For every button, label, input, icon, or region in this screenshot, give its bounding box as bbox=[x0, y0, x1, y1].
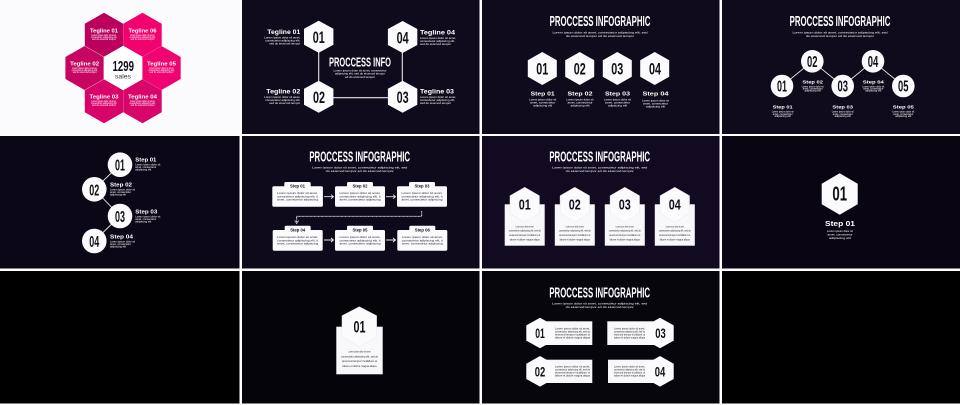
text block: center description: ed do eiusmod tempor bbox=[345, 75, 375, 79]
circle 04: 04 bbox=[868, 54, 878, 71]
hexagon: Tegline 03: sed do eiusmod tempor bbox=[92, 103, 116, 107]
hexagon: Tegline 05: Lorem ipsum dolor sit amet, bbox=[149, 66, 174, 70]
tab 04 bbox=[608, 356, 674, 387]
panel: pink hexagon cluster bbox=[0, 0, 240, 134]
tab 04: 04 bbox=[655, 363, 665, 379]
tab 01: consectetur adipiscing elit, sed do bbox=[555, 329, 590, 333]
text block: center description bbox=[334, 68, 387, 79]
hexagon: Tegline 01: Tegline 01 bbox=[90, 28, 118, 34]
label: Step 05: amet, consectetur bbox=[893, 112, 913, 116]
tab 04: Lorem ipsum dolor sit amet, bbox=[614, 364, 645, 368]
text block: subtitle: Lorem ipsum dolor sit amet, consectetur adipiscing elit, sed bbox=[552, 166, 648, 170]
text block: center description: adipiscing elit, sed do eiusmod tempor bbox=[335, 72, 385, 76]
card: Step 01: amet, consectetur adipiscing bbox=[277, 198, 319, 202]
label: Tegline 01 bbox=[264, 29, 301, 46]
envelope card 02: 02 bbox=[569, 197, 581, 214]
label: Tegline 03 bbox=[420, 88, 456, 105]
envelope card 02: eiusmod tempor incididunt ut bbox=[559, 233, 591, 237]
card: Step 05: amet, consectetur adipiscing bbox=[340, 242, 381, 246]
tab 03 bbox=[607, 318, 674, 348]
panel: empty black slide left bbox=[0, 271, 240, 404]
tab 02: Lorem ipsum dolor sit amet, bbox=[555, 364, 590, 368]
circle 05 bbox=[892, 75, 915, 97]
circle 01: 01 bbox=[777, 79, 787, 96]
hexagon: center sales total: sales bbox=[115, 74, 132, 80]
card: Step 02 bbox=[335, 182, 385, 207]
card: Step 01 bbox=[272, 182, 323, 207]
panel: four envelope cards bbox=[482, 136, 720, 268]
tab 01: labore et dolore magna aliqua bbox=[555, 335, 590, 339]
hexagon: Tegline 02: Lorem ipsum dolor sit amet, bbox=[72, 66, 97, 70]
envelope card 04: eiusmod tempor incididunt ut bbox=[659, 233, 691, 237]
text block: subtitle: do eiusmod tempor ed do eiusmod tempor bbox=[806, 34, 874, 38]
text block: center description: Lorem ipsum dolor sit amet, consectetur bbox=[334, 68, 387, 72]
label: Step 02 bbox=[110, 183, 135, 196]
card: Step 03: Step 03 bbox=[414, 184, 430, 189]
tab 01: 01 bbox=[535, 325, 545, 341]
label: Step 05: adipiscing elit bbox=[895, 114, 912, 118]
label: Tegline 04: consectetur adipiscing elit, bbox=[420, 39, 455, 43]
tab 03: eiusmod tempor incididunt ut bbox=[614, 332, 645, 336]
text block: subtitle: Lorem ipsum dolor sit amet, consectetur adipiscing elit, sed bbox=[312, 166, 408, 170]
step 02: Step 02 bbox=[568, 92, 592, 98]
envelope card 01: Lorem ipsum dolor sit amet bbox=[348, 350, 371, 354]
heading: proccess info: PROCCESS INFO bbox=[329, 55, 391, 70]
tab 03: 03 bbox=[655, 325, 666, 341]
label: Step 02: amet, consectetur bbox=[110, 190, 131, 194]
label: Step 03: amet, consectetur bbox=[833, 112, 853, 116]
step 04 bbox=[640, 52, 669, 108]
text block: subtitle: do eiusmod tempor ed do eiusmod tempor bbox=[326, 169, 394, 173]
label: Tegline 01: sed do eiusmod tempor bbox=[269, 42, 300, 46]
connector lines bbox=[319, 50, 402, 98]
envelope card 04 bbox=[655, 187, 695, 246]
hexagon: Tegline 05 bbox=[142, 46, 181, 90]
card: Step 06: Step 06 bbox=[415, 228, 430, 233]
tab 03: consectetur adipiscing elit, sed do bbox=[614, 329, 645, 333]
hexagon 02: 02 bbox=[313, 88, 325, 107]
label: Step 02: Step 02 bbox=[110, 183, 132, 189]
envelope card 01: eiusmod tempor incididunt ut bbox=[342, 359, 377, 363]
hexagon: Tegline 03 bbox=[85, 79, 123, 123]
step 02: adipiscing elit bbox=[570, 104, 590, 108]
card: Step 01: consectetur adipiscing elit, it bbox=[277, 194, 318, 198]
circle 03 bbox=[108, 204, 132, 228]
panel: six step flow bbox=[242, 136, 480, 268]
hexagon 01: 01 bbox=[313, 28, 325, 47]
hexagon: Tegline 06: sed do eiusmod tempor bbox=[130, 37, 155, 41]
label: Tegline 04 bbox=[420, 30, 456, 46]
hexagon 01 bbox=[822, 173, 858, 215]
hexagon: Tegline 01: consectetur adipiscing elit, bbox=[91, 35, 117, 39]
card: Step 06: amet, consectetur adipiscing bbox=[402, 242, 443, 246]
card: Step 04: Step 04 bbox=[290, 228, 306, 233]
step 01: adipiscing elit bbox=[533, 104, 553, 108]
step 03: amet, consectetur bbox=[605, 100, 630, 104]
panel: five circle steps bbox=[722, 0, 960, 134]
step 01: Lorem ipsum dolor sit bbox=[529, 98, 557, 102]
card: Step 03: consectetur adipiscing elit, it bbox=[402, 194, 443, 198]
step 04: amet, consectetur bbox=[643, 102, 668, 106]
label: Tegline 03: sed do eiusmod tempor bbox=[420, 101, 451, 105]
circle 03: 03 bbox=[115, 209, 125, 226]
envelope card 01 bbox=[336, 307, 383, 374]
envelope card 03: labore et dolore magna aliqua bbox=[610, 237, 640, 241]
label: Step 05 bbox=[892, 104, 915, 118]
envelope card 03: consectetur adipiscing elit, sed do bbox=[609, 229, 641, 233]
hexagon 01: 01 bbox=[832, 184, 847, 206]
step 03: Step 03 bbox=[605, 92, 631, 98]
panel: vertical zigzag circles bbox=[0, 136, 240, 268]
label: Step 02: adipiscing elit bbox=[805, 89, 821, 93]
card: Step 05 bbox=[335, 226, 385, 251]
text block: subtitle bbox=[552, 301, 648, 309]
envelope card 01: Lorem ipsum dolor sit amet bbox=[516, 224, 534, 228]
label: Tegline 02: Lorem ipsum dolor sit amet, bbox=[264, 95, 301, 99]
label: Step 01: Step 01 bbox=[825, 219, 856, 228]
hexagon: Tegline 02: consectetur adipiscing elit, bbox=[72, 68, 98, 72]
label: Step 01 bbox=[135, 158, 161, 171]
text block: subtitle: do eiusmod tempor ed do eiusmod tempor bbox=[566, 305, 634, 309]
step 03: Lorem ipsum dolor sit bbox=[604, 98, 631, 102]
label: Tegline 04: sed do eiusmod tempor bbox=[420, 42, 451, 46]
label: Step 03: Lorem ipsum dolor sit bbox=[832, 110, 854, 114]
hexagon: Tegline 01: Lorem ipsum dolor sit amet, bbox=[92, 33, 117, 37]
arrow: step 04 to 05 bbox=[324, 238, 334, 242]
text block: subtitle bbox=[552, 166, 648, 173]
circle 03: 03 bbox=[837, 79, 848, 96]
label: Step 04 bbox=[110, 234, 135, 249]
circle 02: 02 bbox=[89, 182, 99, 199]
envelope card 04: labore et dolore magna aliqua bbox=[660, 237, 690, 241]
card: Step 02: consectetur adipiscing elit, it bbox=[340, 194, 381, 198]
step 04: 04 bbox=[649, 61, 662, 79]
arrow: step 05 to 06 bbox=[386, 238, 396, 242]
arrow: step 01 to 02 bbox=[324, 195, 334, 199]
hexagon 01 bbox=[304, 21, 333, 53]
label: Step 05: Lorem ipsum dolor sit bbox=[892, 110, 915, 114]
hexagon: Tegline 02: sed do eiusmod tempor bbox=[73, 70, 97, 74]
step 01: amet, consectetur bbox=[530, 100, 555, 104]
envelope card 03: Lorem ipsum dolor sit amet bbox=[616, 224, 634, 228]
label: Step 01: Lorem ipsum dolor sit bbox=[827, 229, 853, 233]
hexagon 04 bbox=[388, 21, 417, 53]
envelope card 03: 03 bbox=[619, 197, 631, 214]
text block: subtitle: Lorem ipsum dolor sit amet, consectetur adipiscing elit, sed bbox=[792, 30, 888, 34]
text block: subtitle bbox=[552, 30, 648, 38]
hexagon: Tegline 03: Tegline 03 bbox=[90, 94, 119, 100]
circle 03 bbox=[831, 75, 854, 97]
label: Step 02: Step 02 bbox=[802, 80, 823, 86]
step 01 bbox=[528, 52, 557, 108]
label: Step 03: Lorem ipsum dolor sit bbox=[135, 215, 161, 219]
hexagon: Tegline 03: consectetur adipiscing elit, bbox=[91, 101, 117, 105]
label: Step 03: adipiscing elit bbox=[135, 220, 152, 224]
heading: proccess infographic: PROCCESS INFOGRAPHIC bbox=[549, 150, 650, 166]
hexagon: Tegline 06: Lorem ipsum dolor sit amet, bbox=[130, 33, 155, 37]
tab 03: Lorem ipsum dolor sit amet, bbox=[614, 326, 645, 330]
envelope card 01 bbox=[505, 187, 545, 246]
label: Tegline 03: Tegline 03 bbox=[420, 88, 455, 96]
card: Step 03: amet, consectetur adipiscing bbox=[402, 198, 443, 202]
hexagon: Tegline 06 bbox=[123, 13, 162, 57]
label: Step 01: amet, consectetur bbox=[773, 112, 793, 116]
label: Step 01 bbox=[772, 104, 794, 118]
step 02 bbox=[565, 52, 594, 108]
envelope card 01: eiusmod tempor incididunt ut bbox=[509, 233, 540, 237]
circle 05: 05 bbox=[898, 79, 909, 96]
panel: empty black slide right bbox=[722, 271, 960, 404]
label: Tegline 04: Lorem ipsum dolor sit amet, bbox=[420, 36, 456, 40]
circle 04 bbox=[82, 229, 107, 253]
card: Step 04 bbox=[273, 226, 323, 251]
circle 02: 02 bbox=[807, 54, 818, 71]
label: Step 03: amet, consectetur bbox=[135, 217, 156, 221]
hexagon: Tegline 01: sed do eiusmod tempor bbox=[92, 37, 116, 41]
hexagon: Tegline 03: Lorem ipsum dolor sit amet, bbox=[92, 99, 117, 103]
tab 02: labore et dolore magna aliqua bbox=[555, 373, 590, 377]
label: Tegline 02: sed do eiusmod tempor bbox=[269, 101, 300, 105]
card: Step 05: consectetur adipiscing elit, it bbox=[340, 238, 381, 242]
label: Step 02: Lorem ipsum dolor sit bbox=[110, 188, 135, 192]
label: Step 03: Step 03 bbox=[135, 210, 157, 216]
envelope card 02 bbox=[555, 187, 595, 246]
circle 01 bbox=[771, 75, 793, 97]
label: Tegline 03: Lorem ipsum dolor sit amet, bbox=[420, 95, 456, 99]
envelope card 02: Lorem ipsum dolor sit amet bbox=[566, 224, 584, 228]
card: Step 06 bbox=[397, 226, 447, 251]
card: Step 02: Step 02 bbox=[352, 184, 368, 189]
label: Step 02 bbox=[802, 80, 824, 93]
arrow: step 02 to 03 bbox=[386, 195, 396, 199]
tab 02 bbox=[526, 356, 592, 387]
hexagon 03: 03 bbox=[397, 88, 409, 107]
card: Step 05: Lorem ipsum dolor sit amet, bbox=[340, 235, 381, 239]
hexagon: Tegline 02 bbox=[65, 46, 104, 90]
hexagon 04: 04 bbox=[397, 28, 409, 48]
card: Step 04: Lorem ipsum dolor sit amet, bbox=[277, 235, 318, 239]
step 03: adipiscing elit bbox=[608, 104, 627, 108]
label: Step 01: Lorem ipsum dolor sit bbox=[135, 163, 161, 167]
card: Step 01: Lorem ipsum dolor sit amet, bbox=[277, 191, 318, 195]
card: Step 06: consectetur adipiscing elit, it bbox=[402, 238, 443, 242]
label: Step 01: Step 01 bbox=[135, 158, 156, 164]
hexagon: center sales total bbox=[104, 46, 142, 90]
text block: subtitle bbox=[312, 166, 408, 173]
envelope card 01: consectetur adipiscing elit, sed do bbox=[509, 229, 541, 233]
label: Tegline 02 bbox=[264, 88, 301, 105]
tab 01: eiusmod tempor incididunt ut bbox=[555, 332, 590, 336]
envelope card 01: labore et dolore magna aliqua bbox=[510, 237, 540, 241]
envelope card 02: labore et dolore magna aliqua bbox=[560, 237, 590, 241]
hexagon: Tegline 04: sed do eiusmod tempor bbox=[130, 103, 155, 107]
card: Step 03: Lorem ipsum dolor sit amet, bbox=[402, 191, 443, 195]
step 03: 03 bbox=[611, 61, 623, 79]
tab 04: eiusmod tempor incididunt ut bbox=[614, 370, 645, 374]
connector lines bbox=[782, 61, 903, 86]
tab 02: 02 bbox=[535, 363, 545, 379]
tab 04: labore et dolore magna aliqua bbox=[614, 373, 645, 377]
step 01: 01 bbox=[536, 61, 548, 79]
label: Tegline 01: Tegline 01 bbox=[267, 29, 301, 36]
circle 02 bbox=[82, 177, 107, 202]
hexagon: Tegline 06: Tegline 06 bbox=[128, 28, 157, 34]
step 04: Lorem ipsum dolor sit bbox=[642, 98, 669, 102]
label: Tegline 02: Tegline 02 bbox=[266, 88, 301, 96]
envelope card 01: 01 bbox=[519, 197, 531, 214]
envelope card 02: consectetur adipiscing elit, sed do bbox=[559, 229, 591, 233]
label: Step 04: adipiscing elit bbox=[865, 89, 882, 93]
hexagon 03 bbox=[388, 81, 417, 113]
tab 01: Lorem ipsum dolor sit amet, bbox=[555, 326, 590, 330]
label: Step 04 bbox=[862, 80, 885, 93]
envelope card 01: labore et dolore magna aliqua bbox=[342, 364, 377, 368]
envelope card 01: consectetur adipiscing elit, sed do bbox=[341, 354, 378, 358]
envelope card 04: 04 bbox=[669, 197, 681, 214]
card: Step 03 bbox=[397, 182, 447, 207]
step 01: Step 01 bbox=[531, 92, 556, 98]
label: Tegline 03: consectetur adipiscing elit, bbox=[420, 98, 455, 102]
label: Step 02: Lorem ipsum dolor sit bbox=[802, 84, 824, 88]
card: Step 06: Lorem ipsum dolor sit amet, bbox=[402, 235, 443, 239]
panel: four hexagon text tabs bbox=[482, 271, 720, 404]
label: Step 04: adipiscing elit bbox=[110, 245, 126, 249]
tab 04: consectetur adipiscing elit, sed do bbox=[614, 367, 645, 371]
label: Tegline 04: Tegline 04 bbox=[420, 30, 456, 36]
arrow: step 03 down to 04 bbox=[295, 211, 422, 224]
heading: proccess infographic: PROCCESS INFOGRAPHIC bbox=[549, 285, 650, 301]
label: Step 04: amet, consectetur bbox=[863, 87, 883, 91]
step 02: Lorem ipsum dolor sit bbox=[566, 98, 594, 102]
step 03 bbox=[603, 52, 632, 108]
hexagon: Tegline 04 bbox=[123, 79, 162, 123]
card: Step 02: Lorem ipsum dolor sit amet, bbox=[340, 191, 381, 195]
envelope card 04: consectetur adipiscing elit, sed do bbox=[659, 229, 691, 233]
label: Step 03 bbox=[832, 104, 854, 118]
label: Step 04: Step 04 bbox=[863, 80, 884, 86]
card: Step 04: consectetur adipiscing elit, it bbox=[277, 238, 318, 242]
label: Step 01 bbox=[825, 219, 856, 240]
label: Step 01: Step 01 bbox=[773, 104, 793, 110]
text block: subtitle: do eiusmod tempor ed do eiusmod tempor bbox=[566, 34, 634, 38]
envelope card 03 bbox=[605, 187, 645, 246]
panel: four hexagon steps bbox=[482, 0, 720, 134]
label: Step 01: amet, consectetur bbox=[828, 232, 853, 236]
label: Step 03 bbox=[135, 210, 161, 224]
panel: single envelope card bbox=[242, 271, 480, 404]
tab 02: consectetur adipiscing elit, sed do bbox=[555, 367, 590, 371]
hexagon: Tegline 04: Tegline 04 bbox=[128, 94, 157, 100]
label: Tegline 01: Lorem ipsum dolor sit amet, bbox=[264, 36, 301, 40]
step 04: adipiscing elit bbox=[646, 104, 665, 108]
circle 01 bbox=[108, 152, 132, 177]
label: Step 01: adipiscing elit bbox=[135, 167, 152, 171]
hexagon: Tegline 04: consectetur adipiscing elit, bbox=[130, 101, 156, 105]
text block: subtitle: Lorem ipsum dolor sit amet, consectetur adipiscing elit, sed bbox=[552, 301, 648, 305]
heading: proccess infographic: PROCCESS INFOGRAPHIC bbox=[550, 14, 650, 30]
label: Step 01: Lorem ipsum dolor sit bbox=[772, 110, 794, 114]
circle 02 bbox=[801, 50, 824, 73]
envelope card 01: 01 bbox=[354, 318, 366, 337]
card: Step 04: amet, consectetur adipiscing bbox=[277, 242, 319, 246]
hexagon: Tegline 04: Lorem ipsum dolor sit amet, bbox=[130, 99, 155, 103]
step 02: amet, consectetur bbox=[568, 100, 593, 104]
label: Tegline 01: consectetur adipiscing elit, bbox=[265, 38, 301, 42]
hexagon: Tegline 02: Tegline 02 bbox=[70, 62, 99, 68]
hexagon 02 bbox=[304, 81, 333, 113]
circle 01: 01 bbox=[115, 158, 125, 175]
step 02: 02 bbox=[574, 61, 586, 79]
card: Step 05: Step 05 bbox=[352, 228, 368, 233]
step 04: Step 04 bbox=[642, 92, 669, 98]
label: Step 02: adipiscing elit bbox=[110, 192, 126, 196]
label: Step 04: Step 04 bbox=[110, 234, 133, 240]
text block: subtitle bbox=[792, 30, 888, 38]
hexagon: Tegline 01 bbox=[85, 13, 123, 57]
label: Step 01: adipiscing elit bbox=[775, 114, 791, 118]
label: Step 02: amet, consectetur bbox=[803, 87, 823, 91]
hexagon: Tegline 06: consectetur adipiscing elit, bbox=[130, 35, 156, 39]
tab 03: labore et dolore magna aliqua bbox=[614, 335, 645, 339]
label: Step 04: amet, consectetur bbox=[110, 242, 131, 246]
tab 02: eiusmod tempor incididunt ut bbox=[555, 370, 590, 374]
circle 04: 04 bbox=[89, 234, 99, 251]
envelope card 03: eiusmod tempor incididunt ut bbox=[609, 233, 641, 237]
panel: single hexagon step bbox=[722, 136, 960, 268]
card: Step 02: amet, consectetur adipiscing bbox=[340, 198, 381, 202]
connector lines bbox=[94, 165, 120, 241]
tab 01 bbox=[526, 318, 592, 348]
text block: subtitle: do eiusmod tempor ed do eiusmod tempor bbox=[566, 169, 634, 173]
label: Step 01: amet, consectetur bbox=[135, 165, 156, 169]
heading: proccess infographic: PROCCESS INFOGRAPHIC bbox=[309, 150, 410, 166]
label: Step 04: Lorem ipsum dolor sit bbox=[110, 239, 135, 243]
text block: subtitle: Lorem ipsum dolor sit amet, consectetur adipiscing elit, sed bbox=[552, 30, 648, 34]
hexagon: center sales total: 1299 bbox=[113, 58, 134, 75]
envelope card 04: Lorem ipsum dolor sit amet bbox=[666, 224, 684, 228]
label: Step 01: adipiscing elit bbox=[829, 236, 851, 240]
hexagon: Tegline 05: sed do eiusmod tempor bbox=[150, 70, 174, 74]
panel: proccess info bbox=[242, 0, 480, 134]
label: Step 04: Lorem ipsum dolor sit bbox=[862, 84, 885, 88]
hexagon: Tegline 05: consectetur adipiscing elit, bbox=[148, 68, 175, 72]
label: Step 03: Step 03 bbox=[832, 104, 853, 110]
label: Step 03: adipiscing elit bbox=[835, 114, 851, 118]
hexagon: Tegline 05: Tegline 05 bbox=[147, 62, 176, 68]
circle 04 bbox=[862, 50, 884, 73]
label: Tegline 02: consectetur adipiscing elit, bbox=[265, 98, 301, 102]
label: Step 05: Step 05 bbox=[893, 104, 914, 110]
card: Step 01: Step 01 bbox=[290, 184, 306, 189]
